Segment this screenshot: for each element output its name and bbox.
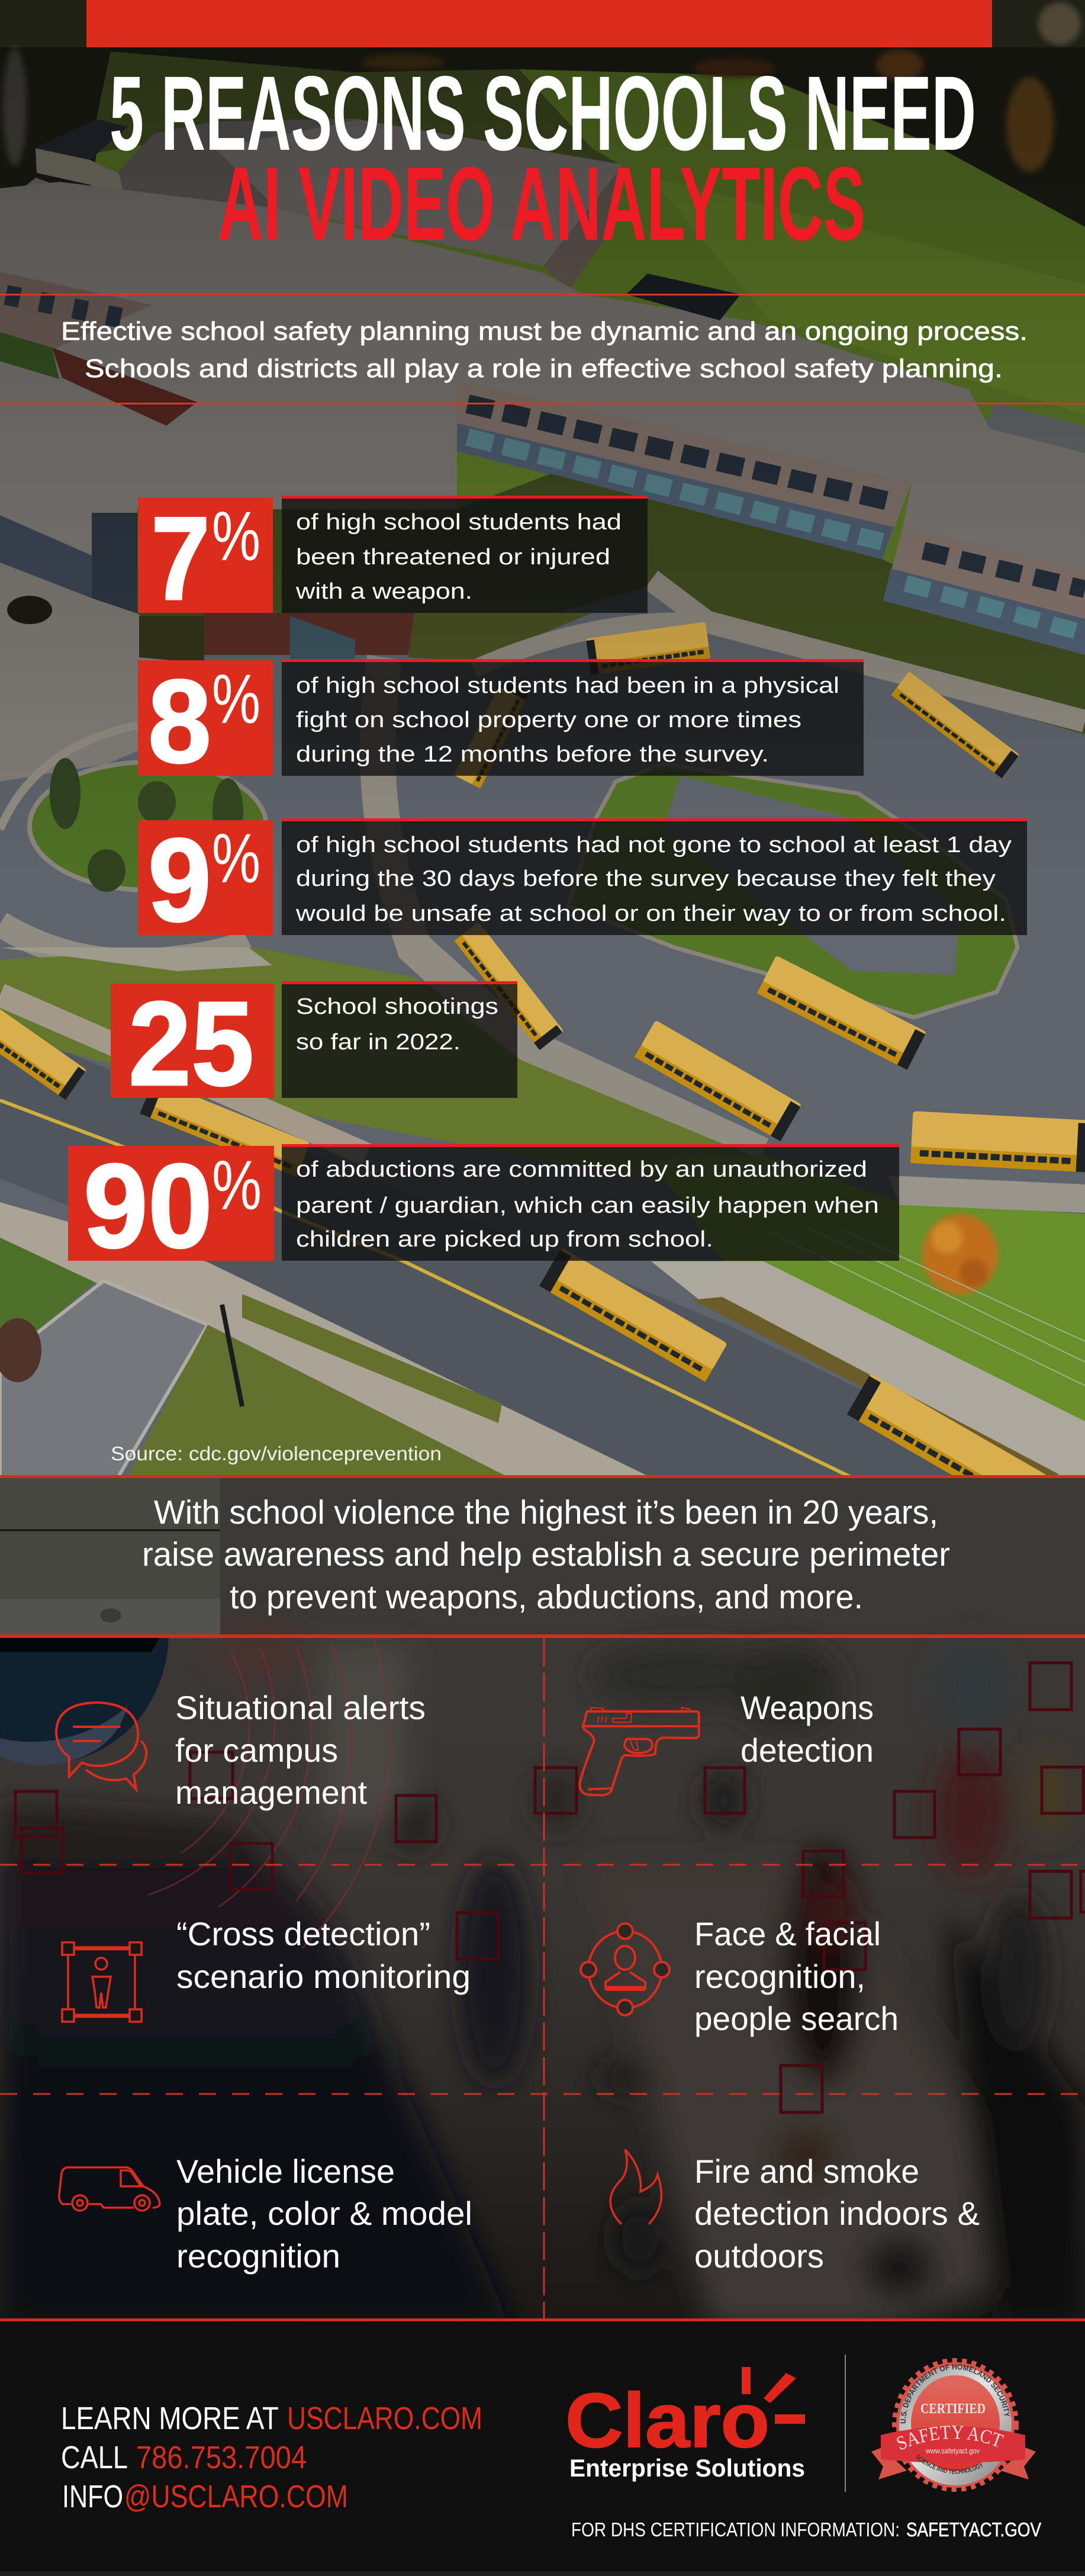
walkways <box>0 580 1085 1155</box>
stat: 9% <box>138 814 1027 946</box>
SAFETY Act certified badge <box>871 2358 1036 2492</box>
brick building <box>139 613 592 663</box>
stat: 8%: of high school students had been in a physical <box>296 673 839 698</box>
feature: face recognition: recognition, <box>694 1958 865 1995</box>
school buses <box>0 622 1085 1517</box>
stat: 8%: 8 <box>148 656 211 788</box>
stat: 9%: of high school students had not gone to school at least 1 day <box>296 833 1012 857</box>
certification note: FOR DHS CERTIFICATION INFORMATION: <box>571 2519 900 2540</box>
feature: fire and smoke: detection indoors & <box>694 2195 980 2232</box>
house <box>34 119 128 204</box>
right grass and sidewalk <box>651 1155 1085 1477</box>
feature: fire and smoke <box>610 2150 980 2275</box>
contact details: @USCLARO.COM <box>124 2479 348 2514</box>
stat: 7%: 7 <box>151 493 210 625</box>
lawn lower left <box>0 947 764 1190</box>
stat: 25: 25 <box>128 977 254 1110</box>
icon: van <box>59 2167 160 2211</box>
feature: face recognition: Face & facial <box>694 1915 881 1952</box>
awareness band: With school violence the highest it’s been in 20 years, <box>154 1493 938 1531</box>
feature: vehicle recognition: Vehicle license <box>176 2153 395 2190</box>
SAFETY Act certified badge: SAFETY ACT <box>897 2426 1004 2449</box>
feature: situational alerts: management <box>175 1774 367 1811</box>
intro band: Effective school safety planning must be dynamic and an ongoing process. <box>61 317 1028 346</box>
contact details: USCLARO.COM <box>287 2401 482 2436</box>
intro band: Schools and districts all play a role in effective school safety planning. <box>85 354 1003 383</box>
contact details: LEARN MORE AT <box>61 2401 279 2436</box>
stat: 8%: fight on school property one or more times <box>296 708 801 733</box>
top red bar <box>86 0 992 47</box>
title <box>110 54 976 262</box>
feature: situational alerts: for campus <box>175 1732 338 1769</box>
icon: flame <box>610 2150 661 2224</box>
SAFETY Act certified badge: CERTIFIED <box>920 2401 986 2417</box>
stat: 90%: of abductions are committed by an unauthorized <box>296 1157 867 1182</box>
feature: vehicle recognition <box>59 2153 472 2275</box>
stat: 7%: with a weapon. <box>295 579 472 604</box>
stat: 7%: of high school students had <box>296 510 622 535</box>
awareness band: to prevent weapons, abductions, and more. <box>230 1578 863 1616</box>
icon: face search nodes <box>581 1923 669 2015</box>
icon: chat bubbles <box>56 1703 146 1790</box>
diagonal road <box>0 1053 1038 1477</box>
feature: face recognition <box>581 1915 899 2037</box>
contact details <box>61 2401 482 2514</box>
ground asphalt <box>0 592 1085 1477</box>
entrance and plaza <box>0 513 195 782</box>
green islands <box>30 758 1018 1017</box>
radar arcs <box>148 1638 390 1948</box>
feature: situational alerts: Situational alerts <box>175 1689 426 1726</box>
stat: 7%: % <box>212 497 260 576</box>
stat: 8%: % <box>212 660 260 738</box>
feature: cross detection <box>62 1915 471 2022</box>
SAFETY Act certified badge: www.safetyact.gov <box>925 2446 980 2455</box>
awareness band: raise awareness and help establish a secure perimeter <box>142 1536 950 1573</box>
certification note: SAFETYACT.GOV <box>906 2519 1041 2540</box>
left sidewalk, parking lot and lawn <box>0 1202 651 1477</box>
stat: 90%: children are picked up from school. <box>296 1227 713 1252</box>
stat: 7%: been threatened or injured <box>296 545 610 570</box>
roof B main <box>0 182 1085 570</box>
background photo: blurred crowd and security camera <box>0 1477 1085 2327</box>
contact details: INFO <box>62 2479 123 2514</box>
roof A <box>214 120 623 290</box>
contact details: 786.753.7004 <box>136 2440 307 2475</box>
feature: weapons detection: detection <box>740 1732 874 1769</box>
awareness band <box>0 1475 1085 1638</box>
feature: situational alerts <box>56 1689 426 1811</box>
left facade <box>0 272 152 349</box>
SAFETY Act certified badge: SCIENCE AND TECHNOLOGY <box>916 2455 983 2474</box>
stat: 9%: during the 30 days before the survey because they felt they <box>296 866 996 891</box>
stat: 90% <box>68 1139 899 1273</box>
feature: face recognition: people search <box>694 2000 899 2037</box>
feature: weapons detection: Weapons <box>740 1689 874 1726</box>
feature: fire and smoke: outdoors <box>694 2237 824 2275</box>
stat: 25 <box>111 977 517 1110</box>
SAFETY Act certified badge: U.S. DEPARTMENT OF HOMELAND SECURITY <box>900 2364 1010 2423</box>
intro band <box>0 294 1085 404</box>
source note: Source: cdc.gov/violenceprevention <box>111 1443 442 1464</box>
stat: 9%: 9 <box>148 814 211 946</box>
stat: 90%: 90 <box>83 1139 213 1273</box>
detection boxes <box>15 1663 1085 2112</box>
stat: 90%: % <box>212 1146 262 1225</box>
feature: vehicle recognition: plate, color & model <box>176 2195 472 2232</box>
contact details: CALL <box>61 2440 128 2475</box>
stat: 7% <box>138 493 648 625</box>
security camera <box>0 1477 220 1765</box>
feature: cross detection: “Cross detection” <box>176 1915 430 1952</box>
stat: 8%: during the 12 months before the survey. <box>296 742 769 767</box>
stat: 8% <box>138 656 864 788</box>
Claro logo: Claro <box>565 2377 770 2463</box>
stat: 9%: % <box>212 820 260 898</box>
Claro logo: Enterprise Solutions <box>569 2454 805 2482</box>
feature: cross detection: scenario monitoring <box>176 1958 471 1995</box>
feature: fire and smoke: Fire and smoke <box>694 2153 919 2190</box>
Claro logo <box>565 2367 805 2482</box>
main facade <box>457 381 912 560</box>
stat: 25: so far in 2022. <box>296 1030 461 1055</box>
background photo: aerial school with buses <box>0 0 1085 1517</box>
stat: 25: School shootings <box>296 994 498 1019</box>
feature: vehicle recognition: recognition <box>176 2237 340 2275</box>
feature: weapons detection <box>579 1689 874 1796</box>
stat: 9%: would be unsafe at school or on their way to or from school. <box>295 901 1006 926</box>
footer <box>0 2318 1085 2576</box>
right wing <box>883 528 1085 655</box>
icon: handgun <box>579 1707 699 1796</box>
icon: person in bounding box <box>62 1942 141 2022</box>
forest treeline <box>0 0 1085 355</box>
stat: 90%: parent / guardian, which can easily happen when <box>296 1193 879 1218</box>
